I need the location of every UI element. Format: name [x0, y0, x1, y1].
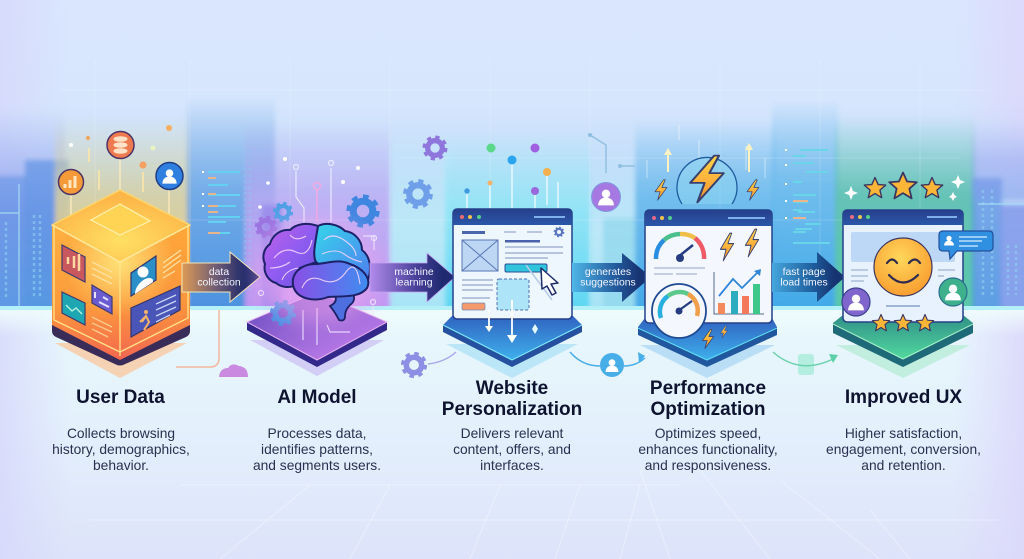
- arrow: fast page load times: fast page: [783, 267, 826, 278]
- icon: lightning badge: [647, 125, 765, 204]
- gauge top: [656, 234, 704, 259]
- text: user data description: history, demographics,: [52, 442, 190, 457]
- gauge bottom: [652, 284, 706, 338]
- heading: website personalization: Website: [476, 378, 548, 399]
- cube cards: [62, 245, 181, 337]
- icon: bottom stars: [872, 314, 934, 331]
- text: improved UX description: Higher satisfaction,: [845, 426, 962, 441]
- connector: orange line and cloud: [176, 310, 248, 377]
- browser window: [843, 210, 963, 322]
- text: website description: Delivers relevant: [461, 426, 564, 441]
- circuit lines: [258, 160, 376, 320]
- cube: [52, 190, 190, 366]
- heading: performance optimization: Optimization: [650, 399, 766, 420]
- panel: performance optimization: [638, 125, 777, 378]
- text: user data description: Collects browsing: [67, 426, 175, 441]
- heading: user data: User Data: [76, 387, 165, 408]
- icon: gears: [256, 137, 456, 376]
- heading: performance optimization: Performance: [650, 378, 766, 399]
- panel: user data: [52, 125, 190, 378]
- heading: improved UX: Improved UX: [845, 387, 962, 408]
- arrow: data collection: [182, 252, 260, 302]
- text: AI model description: identifies patterns,: [261, 442, 373, 457]
- icon: floating data icons: [58, 125, 183, 225]
- text: improved UX description: and retention.: [861, 458, 946, 473]
- text: AI model description: and segments users.: [253, 458, 381, 473]
- arrow: fast page load times: [772, 252, 845, 302]
- bar chart: [714, 269, 764, 314]
- icon: user nodes: [570, 133, 645, 377]
- platform: [443, 315, 582, 367]
- text: improved UX description: engagement, conversion,: [826, 442, 981, 457]
- arrow: data collection: collection: [197, 278, 241, 288]
- platform shadow: [250, 340, 384, 376]
- text: user data description: behavior.: [93, 458, 149, 473]
- text: AI model description: Processes data,: [268, 426, 366, 441]
- icon: smiley: [874, 238, 932, 296]
- cube shadow: [55, 343, 187, 378]
- data particles: [464, 144, 558, 210]
- arrow: generates suggestions: [572, 253, 651, 302]
- platform: [833, 315, 973, 367]
- browser window: [645, 210, 772, 338]
- text: performance description: and responsiveness.: [645, 458, 771, 473]
- heading: AI model: AI Model: [277, 387, 357, 408]
- platform shadow: [640, 345, 775, 378]
- text: performance description: Optimizes speed,: [655, 426, 761, 441]
- panel: website personalization: [443, 133, 645, 378]
- arrow: fast page load times: load times: [780, 278, 828, 288]
- platform: [638, 318, 777, 367]
- arrow: data collection: data: [209, 267, 229, 278]
- browser window: [453, 209, 572, 343]
- platform shadow: [836, 345, 970, 378]
- icon: brain: [256, 220, 380, 324]
- text: performance description: enhances functionality,: [638, 442, 778, 457]
- platform: [247, 292, 387, 367]
- text: website description: interfaces.: [480, 458, 544, 473]
- arrow: machine learning: learning: [396, 278, 433, 288]
- icon: chat bubble: [939, 231, 993, 259]
- text: website description: content, offers, and: [453, 442, 571, 457]
- panel: improved UX: [773, 172, 993, 378]
- code lines: right building: [785, 150, 830, 243]
- code lines: left building: [202, 172, 240, 233]
- arrow: generates suggestions: suggestions: [580, 278, 636, 288]
- flow arrow: [773, 352, 838, 375]
- arrow: generates suggestions: generates: [585, 267, 631, 278]
- arrow: machine learning: machine: [394, 267, 434, 278]
- arrow: machine learning: [370, 253, 455, 302]
- icon: user avatars: [842, 278, 967, 316]
- icon: top stars: [844, 172, 965, 201]
- platform shadow: [446, 344, 578, 378]
- panel: AI model: [247, 137, 456, 376]
- heading: website personalization: Personalization: [442, 399, 582, 420]
